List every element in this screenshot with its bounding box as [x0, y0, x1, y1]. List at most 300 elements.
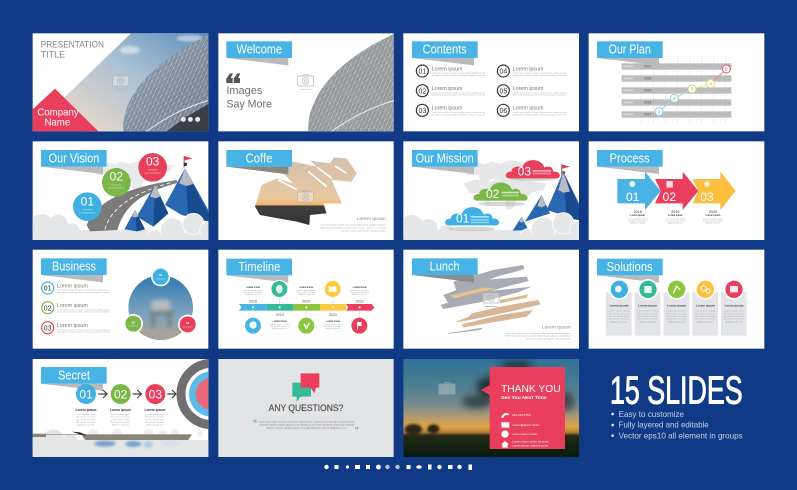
panel: our mission [400, 141, 587, 246]
badge 02: 02 [132, 320, 135, 324]
brush strokes photo [441, 265, 541, 334]
world map backdrop [90, 160, 173, 192]
badge 03: Lorem ipsum [183, 326, 193, 328]
list item 01: Lorem ipsum [432, 66, 463, 72]
card 5: Lorem ipsum [725, 304, 744, 308]
list item 03 [416, 104, 485, 116]
card 4: Adipiscing elit [697, 320, 714, 323]
heading: Secret [58, 368, 90, 382]
badge 03 [178, 315, 197, 334]
card 2: Sit amet consec [637, 312, 658, 315]
circular photo [128, 275, 193, 343]
foreground cloud [520, 212, 579, 235]
list item 03: Lorem ipsum [432, 106, 463, 112]
milestone 2021: LOREM IPSUM [326, 321, 340, 323]
step 01: Sit amet consec [76, 416, 96, 419]
list item 06: 06 [499, 108, 507, 115]
list item 02: Lorem ipsum dolor sit amet, consectetuer adipiscing elit [432, 91, 485, 94]
heading: Solutions [607, 260, 653, 274]
card 5: Sit amet consec [724, 312, 744, 315]
card 3: Sit amet consec [666, 318, 687, 321]
milestone 2019: 2019 [276, 313, 284, 317]
list item 01: 01 [418, 69, 426, 76]
panel: solutions [589, 250, 764, 349]
icon: photo placeholder: Insert Picture [115, 88, 127, 91]
step 03: Lorem ipsum dolor [145, 418, 165, 421]
label 2019: Lorem ipsum [668, 215, 683, 217]
body text [259, 421, 355, 429]
label 2018: 2018 [634, 210, 642, 214]
milestone 2022: Adipiscing elit [352, 293, 368, 296]
caption [506, 324, 571, 341]
card 1: Adipiscing elit [611, 320, 628, 323]
label 2019 [665, 210, 686, 224]
chart bars [622, 63, 731, 118]
heading: Contents [423, 43, 467, 57]
heading: Coffe [246, 151, 272, 165]
badge 01: 01 [159, 273, 163, 277]
panel: lunch [403, 250, 579, 349]
phone row: 011.234.5789 [512, 413, 531, 417]
line chart milestones: 3 [691, 87, 694, 92]
step 02: Sit amet consec [110, 421, 130, 424]
address row: consectetuer adipiscing elit. [512, 444, 549, 448]
list item 06: Lorem ipsum dolor sit amet, consectetuer adipiscing elit [513, 111, 566, 114]
step 01: Lorem ipsum dolor [76, 413, 96, 416]
world map backdrop [460, 160, 547, 210]
icon: closing quote: ” [354, 425, 359, 435]
label 2018: Sit amet consectetuer [628, 219, 648, 222]
step 01 [76, 384, 96, 427]
heading [597, 150, 663, 174]
card 2 [635, 279, 660, 336]
icon strip [324, 464, 472, 470]
milestone 2022: 2022 [356, 299, 364, 303]
milestone 2021: Lorem ipsum dolor [323, 323, 343, 326]
line chart milestones: 2 [673, 96, 676, 101]
heading [226, 150, 292, 174]
item 03: Lorem ipsum [57, 323, 88, 329]
milestone 2021: Adipiscing elit [325, 327, 341, 330]
label 2020: 2020 [709, 210, 717, 214]
icon: photo placeholder [439, 382, 455, 394]
item 02 [42, 302, 111, 314]
panel: our vision [32, 141, 208, 240]
caption: Lorem ipsum dolor sit amet, consectetuer adipiscing elit, sed diam nonummy [321, 224, 386, 227]
item 02: Lorem ipsum dolor sit amet, consectetuer adipiscing elit [57, 308, 111, 311]
item 01: Lorem ipsum dolor sit amet, consectetuer adipiscing elit [57, 289, 111, 292]
card 1: Lorem ipsum [610, 304, 629, 308]
headline: 15 slides [610, 369, 743, 440]
body text: Exerci tation ullamcorper suscipit lobortis nisl ut aliquip ex ea [267, 426, 348, 429]
card 5: Sit amet consec [724, 318, 744, 321]
heading: Process [610, 151, 650, 165]
card 1: Sit amet consec [609, 312, 629, 315]
label 2020: Sit amet consectetuer [703, 219, 723, 222]
step 03 [145, 384, 165, 427]
clouds [31, 429, 208, 457]
list item 06: Lorem ipsum [513, 106, 544, 112]
step 03: Sit amet consec [145, 416, 165, 419]
label 2018: Lorem ipsum [630, 215, 645, 217]
icon: flag on peak [561, 164, 570, 176]
step 01: Lorem ipsum dolor [76, 418, 96, 421]
list item 04: 04 [499, 69, 507, 76]
label 2018: Adipiscing elit [630, 221, 646, 224]
heading: Welcome [237, 43, 282, 57]
item 03 [42, 322, 111, 334]
caption: Ut wisi enim ad minim veniam quis [341, 229, 386, 232]
milestone 2019: Sit amet consec [270, 325, 289, 328]
chart bars: 2018 [644, 101, 652, 105]
foreground cloud [146, 212, 208, 240]
milestone 2020: LOREM IPSUM [299, 287, 314, 289]
email row: Lorem@ipsum.dolor [512, 423, 539, 427]
milestone 2018 [243, 287, 263, 303]
web row: Lorem ipsum dolor [512, 432, 537, 436]
line chart milestones: 1 [658, 109, 661, 114]
card 1: Sit amet consec [609, 318, 629, 321]
quote text: Images [226, 85, 263, 97]
heading [597, 259, 663, 283]
icon: teal node [270, 280, 288, 298]
icon: speech bubbles [292, 373, 319, 402]
item 02: 02 [44, 305, 52, 312]
label 2019: Lorem ipsum dolor [665, 217, 686, 220]
caption: Nibh euismod tincidunt ut laoreet dolore magna aliquam erat volutpat [506, 335, 571, 338]
list item 03: 03 [418, 108, 426, 115]
heading: Our Mission [416, 151, 474, 165]
panel: presentation title slide [33, 33, 208, 131]
icon: flag on peak [184, 156, 193, 168]
icon: blue node [244, 317, 262, 335]
label 2018: Lorem ipsum dolor [628, 217, 648, 220]
label 2020: Adipiscing elit [705, 221, 721, 224]
step 01 [73, 192, 102, 221]
body text: Lorem ipsum dolor sit amet, consectetuer adipiscing elit, sed diam nonummy nibh euismod tincidunt [259, 421, 355, 424]
item 03: Lorem ipsum dolor sit amet, consectetuer adipiscing elit [57, 328, 111, 331]
list item 01: Lorem ipsum dolor sit amet, consectetuer adipiscing elit [432, 72, 485, 75]
card 1 [606, 279, 632, 336]
heading [41, 367, 107, 391]
label 2019: Sit amet consectetuer [665, 219, 686, 222]
panel: welcome [218, 33, 394, 131]
card 2: Lorem ipsum [638, 304, 657, 308]
panel: our plan [589, 33, 764, 131]
card 3: Sit amet consec [666, 312, 687, 315]
heading: Business [52, 260, 96, 274]
badge 03: 03 [186, 321, 190, 325]
red company triangle [33, 89, 98, 131]
arrows [98, 390, 176, 398]
list item 05: Lorem ipsum dolor sit amet, consectetuer adipiscing elit [513, 91, 566, 94]
milestone 2018: LOREM IPSUM [246, 287, 260, 289]
milestone 2018: Sit amet consec [243, 291, 263, 294]
panel: coffe [218, 141, 394, 240]
caption [321, 216, 386, 232]
milestone 2022: Lorem ipsum dolor [350, 289, 370, 292]
icon: photo placeholder: Insert Picture [300, 88, 312, 91]
body text: Ut laoreet dolore magna aliquam erat volutpat ut wisi enim ad minim veniam quis nostrud [259, 423, 354, 426]
milestone 2022 [350, 287, 370, 303]
heading [412, 41, 478, 65]
label 2019: 2019 [671, 210, 679, 214]
step 03: Lorem ipsum dolor [145, 413, 165, 416]
clouds [29, 214, 208, 240]
step 02: Lorem ipsum dolor [110, 418, 131, 421]
card 4: Lorem ipsum [696, 304, 715, 308]
badge 02: Lorem ipsum [129, 326, 139, 328]
card 1: Lorem ipsum dolor [609, 315, 630, 318]
heading: Timeline [238, 260, 280, 274]
milestone 2020: Lorem ipsum dolor [297, 289, 316, 292]
icon: photo placeholder: Insert Picture [300, 204, 312, 207]
step 02: Lorem ipsum [112, 184, 122, 186]
clouds [403, 215, 571, 240]
step 03: Lorem ipsum [148, 169, 158, 171]
title: PRESENTATION [41, 40, 104, 50]
step 02: Lorem ipsum dolor [110, 413, 131, 416]
icon: photo placeholder [483, 291, 499, 308]
card 4: Sit amet consec [695, 318, 716, 321]
feature list [611, 410, 743, 440]
item 03: 03 [44, 325, 52, 332]
arrow 02: 02 [663, 190, 676, 204]
list item 03: Sed diam nonummy nibh euismod tincidunt ut laoreet [432, 113, 485, 116]
item 01: 01 [44, 286, 52, 293]
step 03 [138, 153, 167, 182]
card 2: Sit amet consec [637, 318, 658, 321]
icon: green node [297, 317, 315, 335]
card 3: Adipiscing elit [668, 320, 686, 323]
sunset photo [403, 359, 579, 457]
milestone 2019: LOREM IPSUM [273, 321, 287, 323]
milestone 2022: Sit amet consec [350, 291, 369, 294]
heading [41, 258, 107, 282]
item 01 [42, 282, 111, 294]
card 3: Lorem ipsum [667, 304, 686, 308]
ship deck [33, 432, 192, 440]
list item 05: Lorem ipsum [513, 86, 544, 92]
icon: photo placeholder [298, 190, 314, 207]
icon: yellow node [324, 280, 342, 298]
heading: Our Vision [49, 151, 99, 165]
step 01: Lorem ipsum [83, 209, 93, 211]
step 02: Adipiscing elit [112, 424, 129, 427]
panel: any questions [218, 359, 394, 457]
caption: Lorem ipsum [542, 324, 571, 330]
heading: Our Plan [608, 43, 651, 57]
panel: thank you [403, 359, 579, 457]
card 4: Lorem ipsum dolor [695, 315, 716, 318]
label 2019: Adipiscing elit [668, 221, 683, 224]
list item 02: Lorem ipsum [432, 86, 463, 92]
milestone 2022: LOREM IPSUM [353, 287, 367, 289]
card 3 [664, 279, 689, 336]
step 01: 01 [81, 195, 94, 209]
list item 04: Lorem ipsum dolor sit amet, consectetuer adipiscing elit [513, 72, 566, 75]
milestone 2019: Lorem ipsum dolor [270, 323, 290, 326]
list item 04: Lorem ipsum [513, 66, 544, 72]
chart bars: 2017 [644, 113, 652, 117]
cloud 03: 03 [518, 165, 531, 179]
contact card [481, 367, 565, 449]
badge 01 [151, 267, 170, 286]
step 02: Lorem ipsum [110, 408, 131, 412]
badge 02 [124, 314, 143, 333]
company name: Company [37, 108, 79, 119]
milestone 2020: 2020 [302, 299, 310, 303]
card 3: Lorem ipsum dolor [666, 315, 687, 318]
item 02: Sed diam nonummy nibh euismod tincidunt ut laoreet [57, 311, 111, 314]
line chart milestones: 4 [709, 81, 712, 86]
feature list: Easy to customize [619, 410, 684, 419]
cloud 03 [506, 160, 560, 181]
title line 2: TITLE [41, 49, 65, 59]
timeline bar [239, 304, 374, 311]
step 03: Adipiscing elit [147, 424, 164, 427]
mountains [124, 168, 208, 231]
step 02: 02 [110, 170, 123, 184]
item 03: Sed diam nonummy nibh euismod tincidunt ut laoreet [57, 331, 111, 334]
list item 05 [497, 85, 566, 97]
card 5: Lorem ipsum dolor [724, 310, 745, 313]
milestone 2018: Lorem ipsum dolor [243, 289, 263, 292]
arrow 01 [617, 172, 661, 210]
icon: red node [350, 317, 368, 335]
step 02: Lorem ipsum dolor sit [108, 187, 125, 190]
list item 04: Sed diam nonummy nibh euismod tincidunt ut laoreet [513, 74, 566, 77]
step 03: Lorem ipsum [145, 408, 165, 412]
heading: ANY QUESTIONS? [269, 403, 343, 413]
step 02: Sit amet consec [110, 416, 130, 419]
list item 02: Sed diam nonummy nibh euismod tincidunt ut laoreet [432, 94, 485, 97]
water patches [94, 441, 182, 448]
icon: opening quote: “ [253, 417, 257, 427]
label 2020 [703, 210, 723, 224]
cloud 02: 02 [486, 187, 500, 201]
list item 03: Lorem ipsum dolor sit amet, consectetuer adipiscing elit [432, 111, 485, 114]
card 3: Lorem ipsum dolor [666, 310, 687, 313]
arrow 03: 03 [700, 190, 714, 204]
card 5: Lorem ipsum dolor [724, 315, 745, 318]
step 01: Adipiscing elit [78, 424, 95, 427]
list item 01 [416, 65, 485, 77]
panel: contents [403, 33, 579, 131]
milestone 2020 [297, 287, 316, 303]
caption: Lorem ipsum dolor sit amet, consectetuer adipiscing elit, sed diam nonummy [506, 332, 571, 335]
list item 04 [497, 65, 566, 77]
cloud 01 [445, 207, 499, 231]
milestone 2019: Adipiscing elit [272, 327, 288, 330]
brush photo [255, 157, 357, 225]
step 03: Sit amet consec [145, 421, 165, 424]
icon: photo placeholder [298, 74, 314, 91]
winding road [87, 180, 177, 231]
caption: Lorem ipsum [357, 216, 386, 222]
step 03: 03 [146, 155, 160, 169]
item 01: Lorem ipsum [57, 283, 88, 289]
step 01: Lorem ipsum [76, 408, 96, 412]
heading [597, 41, 663, 65]
list item 05: Sed diam nonummy nibh euismod tincidunt ut laoreet [513, 94, 566, 97]
label 2018 [628, 210, 648, 224]
step 03: Lorem ipsum dolor sit [145, 172, 161, 175]
step 01: Lorem ipsum dolor sit [79, 211, 96, 214]
cloud 01: 01 [456, 212, 470, 226]
arrow 02 [655, 172, 698, 210]
heading [226, 41, 292, 65]
milestone 2018: Adipiscing elit [245, 293, 261, 296]
chart bars: 2019 [644, 89, 652, 93]
list item 06: Sed diam nonummy nibh euismod tincidunt ut laoreet [513, 113, 566, 116]
chart bars: 2021 [644, 65, 652, 69]
milestone 2018: 2018 [249, 299, 257, 303]
address row: Lorem ipsum dolor sit amet, [512, 439, 549, 443]
heading [41, 150, 107, 174]
line chart milestones [655, 65, 730, 116]
quote text line 2: Say More [226, 98, 272, 110]
feature list: Vector eps10 all element in groups [619, 431, 743, 440]
subheading: See You Next Time [501, 395, 547, 401]
card 2: Lorem ipsum dolor [637, 310, 658, 313]
card 1: Lorem ipsum dolor [609, 310, 630, 313]
card 2: Lorem ipsum dolor [637, 315, 658, 318]
item 02: Lorem ipsum [57, 303, 88, 309]
panel: secret [32, 359, 208, 457]
list item 02 [416, 85, 485, 97]
chart bars: 2020 [644, 77, 652, 81]
card 4: Lorem ipsum dolor [695, 310, 716, 313]
icon: photo placeholder: Insert Picture [485, 305, 498, 308]
card 5: Adipiscing elit [726, 320, 743, 323]
milestone 2019 [270, 313, 290, 330]
cloud 02 [474, 182, 528, 206]
card 2: Adipiscing elit [639, 320, 657, 323]
milestone 2020: Sit amet consec [297, 291, 316, 294]
caption: Nibh euismod tincidunt ut laoreet dolore magna aliquam erat volutpat [321, 226, 386, 229]
icon: quote marks [226, 73, 240, 83]
company name line 2: Name [44, 117, 70, 128]
milestone 2021: Sit amet consec [323, 325, 343, 328]
panel: business [33, 250, 208, 349]
label 2020: Lorem ipsum dolor [703, 217, 723, 220]
step 02 [102, 168, 131, 197]
step 03: 03 [149, 387, 162, 401]
arrow 03 [693, 172, 736, 210]
milestone 2021 [323, 313, 343, 330]
badge 01: Lorem ipsum [156, 278, 166, 280]
list item 02: 02 [418, 88, 426, 95]
target [176, 359, 208, 429]
list item 05: 05 [499, 88, 507, 95]
heading [226, 259, 292, 283]
card 5 [721, 279, 747, 336]
step 02: 02 [114, 387, 128, 401]
card 4 [692, 279, 718, 336]
milestone 2020: Adipiscing elit [299, 293, 314, 296]
item 01: Sed diam nonummy nibh euismod tincidunt ut laoreet [57, 291, 111, 294]
panel: timeline [218, 250, 394, 349]
milestone 2021: 2021 [329, 313, 337, 317]
step 01: Sit amet consec [76, 421, 96, 424]
address row [501, 439, 549, 448]
card 4: Sit amet consec [695, 312, 716, 315]
step 02 [110, 384, 131, 427]
panel: process [589, 141, 764, 240]
icon: photo placeholder [113, 74, 129, 91]
heading: Lunch [430, 260, 460, 274]
